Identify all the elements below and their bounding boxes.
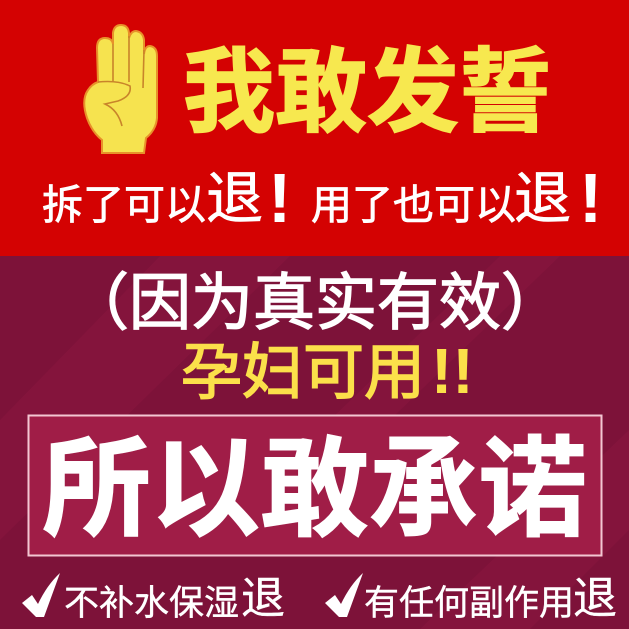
subtitle left: 退 [206,167,263,231]
subtitle left [42,159,291,237]
panel: red header [0,0,629,256]
guarantee: side effects refund [325,573,617,623]
guarantee: side effects refund: 退 [573,574,617,623]
subtitle right: 用了也可以 [311,182,516,228]
icon: check mark [22,573,60,617]
guarantee: side effects refund: 有任何副作用 [364,584,574,623]
subtitle right: ! [579,159,602,237]
text: usable during pregnancy: !! [431,335,474,407]
subtitle right: 退 [514,167,571,231]
heading: promise: 所以敢承诺 [42,429,587,551]
subtitle right [311,159,602,237]
text: because it is genuinely effective: （因为真实有效） [67,269,563,338]
icon: raised hand with three fingers [84,25,157,153]
guarantee: no hydrating refund: 退 [241,574,285,623]
panel: maroon lower background [0,256,629,629]
subtitle left: ! [268,159,291,237]
guarantee: no hydrating refund [22,573,285,623]
icon: check mark [325,573,363,617]
text: usable during pregnancy: 孕妇可用 [181,338,425,406]
guarantee: no hydrating refund: 不补水保湿 [64,584,239,623]
heading: main title: 我敢发誓 [183,42,551,144]
subtitle left: 拆了可以 [42,182,206,228]
panel: promise box [28,416,602,556]
